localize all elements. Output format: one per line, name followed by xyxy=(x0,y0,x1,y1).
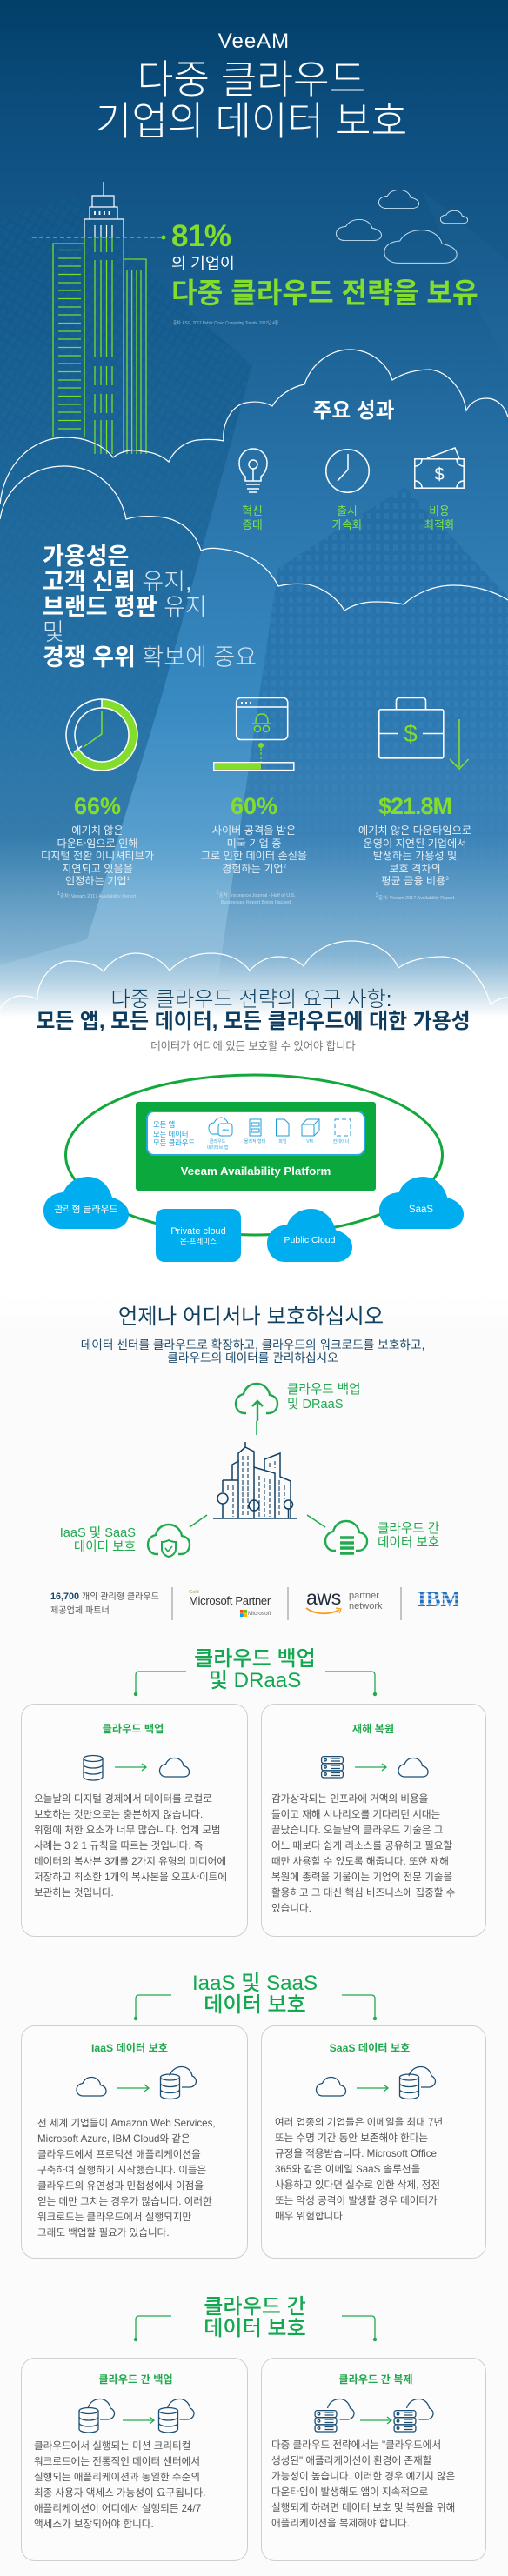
heading: cloud backup and DRaaS: 클라우드 백업 xyxy=(194,1647,316,1670)
text: $21.8M description: 예기치 않은 다운타임으로 xyxy=(358,824,471,837)
text: all apps, data, clouds: 모든 앱 xyxy=(153,1120,175,1129)
heading: 클라우드 백업 xyxy=(103,1723,164,1735)
label: managed cloud: 관리형 클라우드 xyxy=(54,1205,118,1215)
panel: 주요 성과 xyxy=(238,400,465,531)
outline: large white clouds xyxy=(0,349,508,611)
heading: cloud to cloud data protection xyxy=(0,2296,508,2339)
text: 전 세계 기업들이 Amazon Web Services, xyxy=(37,2118,216,2129)
icon: aws smile xyxy=(306,1607,342,1614)
label: cloud to cloud data protection xyxy=(378,1522,439,1550)
label: IaaS and SaaS data protection: 데이터 보호 xyxy=(74,1540,136,1554)
stat: 66%: 66% xyxy=(74,793,121,819)
text: 위험에 처한 요소가 너무 많습니다. 업계 모범 xyxy=(34,1825,221,1836)
icons: small outline clouds xyxy=(336,190,468,264)
label: gold: Gold xyxy=(189,1590,199,1595)
text: 실행되는 애플리케이션과 동일한 수준의 xyxy=(34,2472,200,2483)
heading: availability for all: 모든 앱, 모든 데이터, 모든 클라우드에 대한 가용성 xyxy=(36,1010,471,1033)
title xyxy=(96,57,407,143)
logo: aws partner network xyxy=(306,1586,383,1614)
label: partner network: network xyxy=(349,1601,383,1612)
label: 혁신 증대: 증대 xyxy=(242,518,263,531)
diagram: availability platform xyxy=(43,1073,464,1262)
text: 액세스가 보장되어야 합니다. xyxy=(34,2519,154,2530)
ring: platform ellipse xyxy=(64,1073,444,1237)
text: 애플리케이션을 복제해야 합니다. xyxy=(271,2518,410,2529)
text: 16,700 partners xyxy=(50,1592,159,1616)
text xyxy=(34,2439,205,2533)
text: 60% description: 그로 인한 데이터 손실을 xyxy=(201,850,307,862)
icon: cloud with shield xyxy=(148,1525,190,1557)
text: $21.8M description: 평균 금융 비용3 xyxy=(381,875,449,887)
text: all apps, data, clouds: 모든 클라우드 xyxy=(153,1138,195,1147)
partner strip xyxy=(50,1586,458,1620)
text: 그래도 백업할 필요가 있습니다. xyxy=(37,2227,170,2239)
text block: 가용성은: 및 xyxy=(43,619,64,645)
label: file: 파일 xyxy=(278,1139,287,1145)
subheading: 데이터가 어디에 있든 보호할 수 있어야 합니다 xyxy=(150,1040,356,1052)
source note: col 2: Businesses Report Being Hacked xyxy=(221,900,291,905)
label: cloud native apps: 클라우드 xyxy=(210,1139,225,1145)
icon: banknote: $ xyxy=(434,465,444,484)
connector: brackets xyxy=(130,1668,383,1698)
icon: light bulb xyxy=(238,448,268,493)
text: 데이터의 복사본 3개를 2가지 유형의 미디어에 xyxy=(34,1856,226,1867)
panel: cloud backup xyxy=(21,1704,248,1937)
text: $21.8M description: 발생하는 가용성 및 xyxy=(373,850,457,862)
icon: browser spy with progress bar xyxy=(213,697,295,771)
text: 다운타임이 발생해도 앱이 지속적으로 xyxy=(271,2486,428,2498)
label: cloud backup and DRaaS: 및 DRaaS xyxy=(287,1398,344,1411)
icon: server to cloud xyxy=(320,1754,430,1782)
text: 60% description xyxy=(201,824,307,875)
text: 또는 수명 기간 동안 보존해야 한다는 xyxy=(275,2132,428,2144)
heading: protect anywhere: 언제나 어디서나 보호하십시오 xyxy=(118,1305,384,1329)
text: $21.8M description: 보호 격차의 xyxy=(389,863,441,875)
heading: cloud to cloud data protection: 데이터 보호 xyxy=(204,2317,306,2340)
heading: requirements: 다중 클라우드 전략의 요구 사항: xyxy=(111,988,391,1011)
icon: city buildings xyxy=(213,1442,297,1518)
stat: $21.8M: $21.8M xyxy=(378,793,451,819)
label: on-premises: 온-프레미스 xyxy=(180,1237,217,1245)
source note: col 2 xyxy=(216,891,296,905)
icon: cloud with database xyxy=(325,1521,367,1553)
text: 복원에 총력을 기울이는 기업의 전문 기술을 xyxy=(271,1872,452,1883)
heading: 재해 복원 xyxy=(352,1723,394,1735)
label: 혁신 증대 xyxy=(242,504,263,531)
heading: cloud backup and DRaaS xyxy=(0,1647,508,1692)
heading: IaaS and SaaS data protection: IaaS 및 SaaS xyxy=(192,1971,318,1995)
label: 비용 최적화 xyxy=(424,504,455,531)
text: 생성된" 애플리케이션이 환경에 존재할 xyxy=(271,2455,431,2466)
text: 들이고 재해 시나리오를 기다리던 시대는 xyxy=(271,1809,440,1820)
source note: col 1: 1출처: Veeam 2017 Availability Report xyxy=(57,891,136,899)
text: 사용하고 있다면 실수로 인한 삭제, 정전 xyxy=(275,2179,440,2191)
icon: workload icons: APP xyxy=(222,1128,229,1132)
text: 애플리케이션이 어디에서 실행되든 24/7 xyxy=(34,2503,201,2514)
icon: banknote xyxy=(414,447,465,489)
text: 또는 악성 공격이 발생할 경우 데이터가 xyxy=(275,2195,438,2206)
text: 활용하고 그 대신 핵심 비즈니스에 집중할 수 xyxy=(271,1887,455,1899)
text: 의 기업이: 의 기업이 xyxy=(171,254,235,272)
text: 얻는 데만 그치는 경우가 많습니다. 이러한 xyxy=(37,2196,212,2207)
label: cloud native apps: 네이티브 앱 xyxy=(207,1145,228,1151)
text: 있습니다. xyxy=(271,1903,311,1914)
label: SaaS: SaaS xyxy=(409,1205,433,1215)
text xyxy=(34,1792,227,1901)
text: 66% description xyxy=(41,824,154,887)
panel: cloud to cloud backup xyxy=(21,2358,248,2561)
text: 어느 때보다 쉽게 리소스를 공유하고 필요할 xyxy=(271,1840,452,1852)
label: 출시 가속화: 가속화 xyxy=(331,518,363,531)
text: 16,700 partners: 16,700 개의 관리형 클라우드 xyxy=(50,1592,159,1602)
panel: SaaS data protection xyxy=(261,2025,486,2259)
text: 저장하고 최소한 1개의 복사본을 오프사이트에 xyxy=(34,1872,227,1883)
panel: cloud to cloud replication xyxy=(261,2358,486,2561)
text: all apps, data, clouds xyxy=(153,1120,195,1147)
text: 끝났습니다. 오늘날의 클라우드 기술은 그 xyxy=(271,1825,443,1836)
logo: Microsoft squares xyxy=(240,1610,247,1617)
icon: cloud upload xyxy=(236,1384,277,1421)
text: 가능성이 높습니다. 이러한 경우 예기치 않은 xyxy=(271,2471,455,2482)
icon: 66% ring with clock xyxy=(65,698,138,771)
text: 오늘날의 디지털 경제에서 데이터를 로컬로 xyxy=(34,1793,212,1805)
label: 출시 가속화 xyxy=(331,504,363,531)
label: 비용 최적화: 최적화 xyxy=(424,518,455,531)
label: cloud native apps xyxy=(207,1139,228,1151)
illustration: skyscraper with 81% marker xyxy=(32,182,165,454)
text: 16,700 partners: 제공업체 파트너 xyxy=(50,1606,110,1616)
divider xyxy=(287,1587,289,1620)
label: 비용 최적화: 비용 xyxy=(429,504,450,517)
label: public cloud: Public Cloud xyxy=(284,1235,335,1245)
label: private cloud: Private cloud xyxy=(170,1226,226,1237)
heading: IaaS and SaaS data protection xyxy=(0,1972,508,2016)
text xyxy=(275,2115,443,2225)
icon: server cloud to server cloud xyxy=(313,2398,435,2433)
label: VM: VM xyxy=(306,1139,313,1145)
label: IaaS and SaaS data protection xyxy=(60,1525,136,1554)
text: 보호하는 것만으로는 충분하지 않습니다. xyxy=(34,1809,203,1820)
icon: workload icons xyxy=(209,1117,351,1136)
label: cloud backup and DRaaS xyxy=(287,1383,361,1411)
stat: 81%: 81% xyxy=(171,219,231,253)
text block: 가용성은: 고객 신뢰 유지, xyxy=(43,569,192,595)
label: 출시 가속화: 출시 xyxy=(337,504,358,517)
text: 60% description: 미국 기업 중 xyxy=(227,837,281,849)
subheading: protect anywhere: 클라우드의 데이터를 관리하십시오 xyxy=(167,1351,338,1364)
divider xyxy=(400,1587,402,1620)
icon: cloud to database cloud xyxy=(76,2065,197,2100)
label: IaaS and SaaS data protection: IaaS 및 SaaS xyxy=(60,1526,136,1540)
panel: IaaS data protection xyxy=(21,2025,248,2259)
logo: IBM xyxy=(418,1591,458,1612)
heading: IaaS 데이터 보호 xyxy=(91,2042,168,2054)
label: cloud to cloud data protection: 클라우드 간 xyxy=(378,1522,439,1536)
text: 66% description: 다운타임으로 인해 xyxy=(57,837,138,849)
label: 혁신 증대: 혁신 xyxy=(242,504,263,517)
heading: IaaS and SaaS data protection: 데이터 보호 xyxy=(204,1993,306,2017)
connector: brackets xyxy=(130,2312,383,2343)
source note: col 2: 2출처: Insurance Journal - Half of U.S. xyxy=(216,891,296,898)
logo: Microsoft Partner xyxy=(189,1590,271,1617)
background: sky gradient with buildings xyxy=(0,0,508,1014)
heading: cloud backup and DRaaS: 및 DRaaS xyxy=(209,1669,301,1692)
text block: 가용성은: 경쟁 우위 확보에 중요 xyxy=(43,644,257,671)
heading: cloud to cloud data protection: 클라우드 간 xyxy=(204,2294,306,2319)
text: 클라우드의 유연성과 민첩성에서 이점을 xyxy=(37,2180,204,2192)
text xyxy=(37,2116,216,2241)
text: $21.8M description: 운영이 지연된 기업에서 xyxy=(364,837,466,849)
text: 365와 같은 이메일 SaaS 솔루션을 xyxy=(275,2164,420,2175)
icon: briefcase with falling arrow: $ xyxy=(404,720,418,747)
title: 기업의 데이터 보호 xyxy=(96,99,407,143)
heading: 클라우드 간 복제 xyxy=(338,2373,413,2386)
text: 최종 사용자 액세스 가능성이 요구됩니다. xyxy=(34,2487,205,2499)
label: Microsoft: Microsoft xyxy=(248,1611,271,1617)
outline: white cloud around requirements heading xyxy=(0,940,508,1009)
text: 실행되게 하려면 데이터 보호 및 복원을 위해 xyxy=(271,2502,455,2513)
text: 다중 클라우드 전략에서는 "클라우드에서 xyxy=(271,2439,441,2451)
text: 클라우드에서 프로덕션 애플리케이션을 xyxy=(37,2149,201,2160)
connector: brackets xyxy=(130,1992,383,2021)
logo: Veeam: VeeAM xyxy=(218,30,290,53)
text: 사례는 3 2 1 규칙을 따르는 것입니다. 즉 xyxy=(34,1840,203,1852)
node shapes: clouds and private cloud xyxy=(43,1177,464,1262)
text: 클라우드에서 실행되는 미션 크리티컬 xyxy=(34,2440,190,2452)
text: 60% description: 사이버 공격을 받은 xyxy=(212,824,296,837)
title: 다중 클라우드 xyxy=(137,57,365,102)
source note: 출처: ESG, 2017 Public Cloud Computing Trends, 2017년 4월 xyxy=(173,321,278,326)
label: cloud to cloud data protection: 데이터 보호 xyxy=(378,1536,439,1550)
text: 때만 사용할 수 있도록 해줍니다. 또한 재해 xyxy=(271,1856,449,1867)
icon: database cloud to database cloud xyxy=(78,2398,196,2433)
text block: 가용성은: 브랜드 평판 유지 xyxy=(43,594,207,620)
text: $21.8M description xyxy=(358,824,471,887)
label: aws: aws xyxy=(306,1586,341,1609)
panel: Veeam Availability Platform xyxy=(136,1102,376,1191)
label: partner network xyxy=(349,1591,383,1612)
heading: 클라우드 간 백업 xyxy=(98,2373,173,2386)
text xyxy=(271,1792,455,1917)
label: Microsoft Partner: Microsoft Partner xyxy=(189,1594,271,1607)
text: 66% description: 인정하는 기업1 xyxy=(65,875,130,887)
text block: 가용성은: 가용성은 xyxy=(43,543,129,569)
text: 다중 클라우드 전략을 보유: 다중 클라우드 전략을 보유 xyxy=(171,277,478,309)
panel: workloads xyxy=(146,1111,365,1156)
subheading: protect anywhere: 데이터 센터를 클라우드로 확장하고, 클라우드의 워크로드를 보호하고, xyxy=(81,1338,424,1351)
text: 감가상각되는 인프라에 거액의 비용을 xyxy=(271,1793,428,1805)
heading: 주요 성과: 주요 성과 xyxy=(313,400,394,423)
panel: disaster recovery xyxy=(261,1704,486,1937)
icon: briefcase with falling arrow xyxy=(378,697,469,770)
text: 60% description: 경험하는 기업2 xyxy=(222,863,286,875)
icon: clock xyxy=(325,449,370,493)
subheading: protect anywhere xyxy=(81,1338,424,1364)
divider xyxy=(170,1587,172,1620)
stat: 60%: 60% xyxy=(231,793,277,819)
diagram: city and three protection paths xyxy=(146,1383,369,1558)
text: 66% description: 지연되고 있음을 xyxy=(62,863,133,875)
text: 매우 위험합니다. xyxy=(275,2211,345,2222)
text: 여러 업종의 기업들은 이메일을 최대 7년 xyxy=(275,2117,443,2128)
text: 66% description: 예기치 않은 xyxy=(71,824,124,837)
heading: SaaS 데이터 보호 xyxy=(330,2042,410,2054)
text: 워크로드는 클라우드에서 실행되지만 xyxy=(37,2212,191,2223)
text: 워크로드에는 전통적인 데이터 센터에서 xyxy=(34,2456,200,2467)
text: 규정을 적용받습니다. Microsoft Office xyxy=(275,2148,437,2159)
label: cloud backup and DRaaS: 클라우드 백업 xyxy=(287,1383,361,1397)
label: physical: 물리적 형태 xyxy=(244,1139,265,1145)
text block: 가용성은 xyxy=(43,543,257,671)
source note: col 3: 3출처: Veeam 2017 Availability Report xyxy=(376,893,454,901)
text: 보관하는 것입니다. xyxy=(34,1887,114,1899)
text: 구축하여 실행하기 시작했습니다. 이들은 xyxy=(37,2165,206,2176)
label: partner network: partner xyxy=(349,1591,379,1601)
label: platform name: Veeam Availability Platform xyxy=(181,1165,331,1178)
icon: cloud to database cloud xyxy=(315,2065,438,2100)
icon: database to cloud xyxy=(83,1754,191,1782)
text: 66% description: 디지털 전환 이니셔티브가 xyxy=(41,850,154,862)
text xyxy=(271,2438,455,2532)
text: Microsoft Azure, IBM Cloud와 같은 xyxy=(37,2133,190,2145)
stripes: IBM xyxy=(418,1591,458,1612)
text: all apps, data, clouds: 모든 데이터 xyxy=(153,1129,188,1138)
label: container: 컨테이너 xyxy=(333,1139,349,1145)
